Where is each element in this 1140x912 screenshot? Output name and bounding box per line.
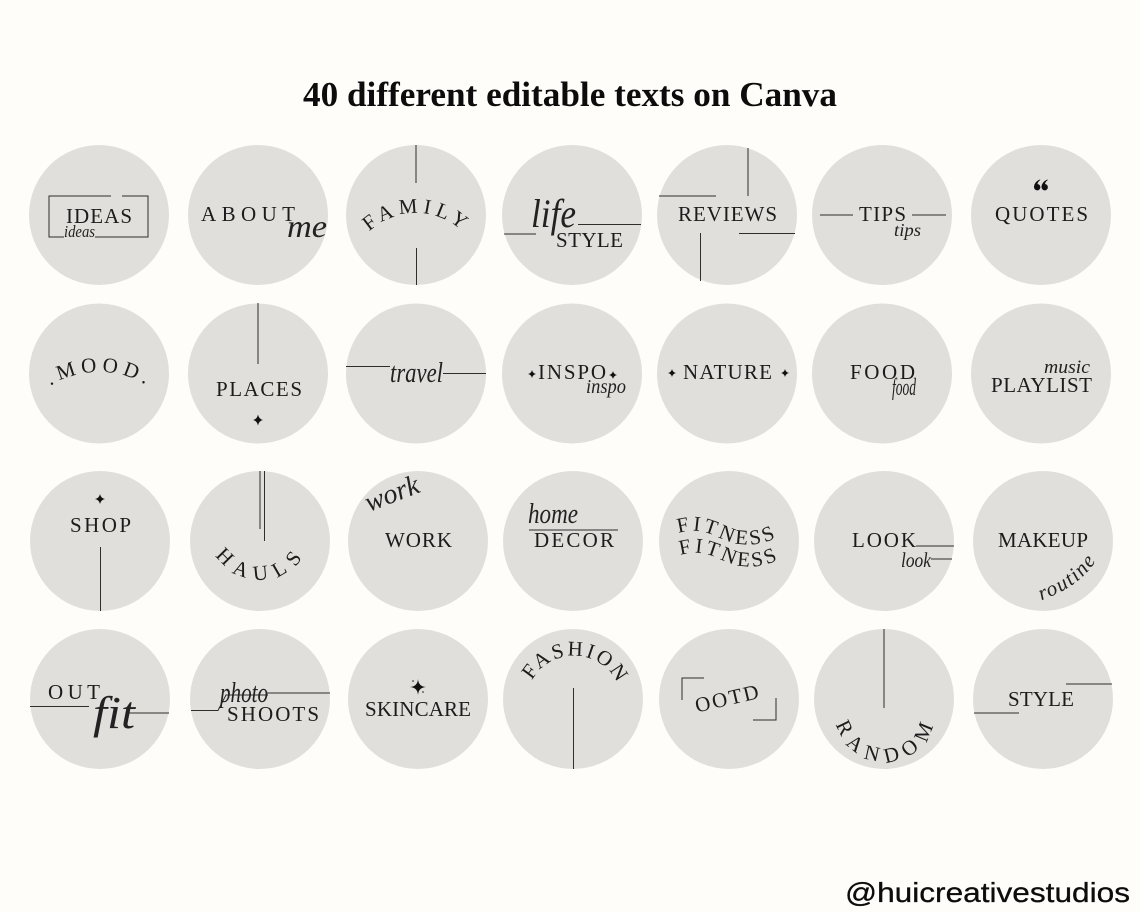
badge: tips: tips xyxy=(894,220,921,240)
badge: reviews: REVIEWS xyxy=(678,202,777,226)
badge: hauls: HAULS xyxy=(215,546,300,580)
badge: lifestyle: STYLE xyxy=(556,228,623,252)
badge: look: LOOK xyxy=(852,528,916,552)
badge: inspo xyxy=(502,304,642,444)
badge: food: FOOD xyxy=(850,360,915,384)
badge: fashion: FASHION xyxy=(521,642,628,680)
badge: look: look xyxy=(901,548,932,572)
badge: outfit: OUT xyxy=(48,680,100,704)
badge: playlist: music xyxy=(1044,357,1091,378)
badge: food xyxy=(812,304,952,444)
badge: inspo: inspo xyxy=(586,376,626,398)
badge: inspo: INSPO xyxy=(538,360,606,384)
badge: home decor xyxy=(503,471,643,611)
badge: tips: TIPS xyxy=(859,202,906,226)
badge: work: WORK xyxy=(385,528,452,552)
badge: travel xyxy=(346,304,486,444)
badge: playlist: PLAYLIST xyxy=(991,373,1092,397)
badge: photoshoots: SHOOTS xyxy=(227,702,319,726)
badge: quotes xyxy=(971,145,1111,285)
badge: fitness: FITNESS xyxy=(678,538,776,567)
badge: fitness xyxy=(659,471,799,611)
badge: work xyxy=(348,469,488,611)
badge: fashion xyxy=(503,629,643,769)
badge: ootd xyxy=(659,629,799,769)
badge: ideas xyxy=(29,145,169,285)
badge: skincare xyxy=(348,629,488,769)
badge: shop xyxy=(30,471,170,611)
badge: style: STYLE xyxy=(1008,687,1074,711)
badge: hauls xyxy=(190,471,330,611)
badge: quotes: QUOTES xyxy=(995,202,1088,226)
badge: photoshoots: photo xyxy=(218,678,268,709)
badge: lifestyle: life xyxy=(531,191,576,236)
badge: family: FAMILY xyxy=(361,199,469,231)
badge: makeup routine xyxy=(973,471,1113,611)
badge: places: PLACES xyxy=(216,377,302,401)
badge: travel: travel xyxy=(390,358,443,389)
badge: photoshoots xyxy=(190,629,330,769)
badge: nature xyxy=(657,304,797,444)
badge: random xyxy=(814,629,954,769)
icon: quotation mark xyxy=(1034,180,1048,190)
badge: outfit: fit xyxy=(93,687,136,738)
badge: look xyxy=(814,471,954,611)
badge: tips xyxy=(812,145,952,285)
badge: makeup routine: MAKEUP xyxy=(998,528,1088,552)
badge: skincare: SKINCARE xyxy=(365,697,471,721)
badge: about me: ABOUT xyxy=(201,202,295,226)
badge: style xyxy=(973,629,1113,769)
badge: outfit xyxy=(30,629,170,769)
badge: about me: me xyxy=(287,208,327,244)
badge: mood: .MOOD. xyxy=(50,358,145,385)
watermark: @huicreativestudios xyxy=(845,877,1130,908)
title: 40 different editable texts on Canva xyxy=(303,75,837,114)
badge: fitness: FITNESS xyxy=(676,516,774,545)
badge: random: RANDOM xyxy=(836,718,934,764)
badge: home decor: DECOR xyxy=(534,528,614,552)
badge: shop: SHOP xyxy=(70,513,131,537)
badge: ootd: OOTD xyxy=(696,686,758,712)
badge: ideas: ideas xyxy=(64,222,95,241)
badge: playlist xyxy=(971,304,1111,444)
badge: reviews xyxy=(657,145,797,285)
badge: places xyxy=(188,303,328,444)
badge: home decor: home xyxy=(528,499,578,530)
badge: makeup routine: routine xyxy=(1038,556,1094,600)
badge: family xyxy=(346,145,486,285)
badge: nature: NATURE xyxy=(683,360,772,384)
badge: lifestyle xyxy=(502,145,642,285)
badge: mood xyxy=(29,304,169,444)
badge: ideas: IDEAS xyxy=(66,204,132,228)
badge: about me xyxy=(188,145,328,285)
badge: food: food xyxy=(892,375,917,401)
badge: work: work xyxy=(360,469,424,519)
